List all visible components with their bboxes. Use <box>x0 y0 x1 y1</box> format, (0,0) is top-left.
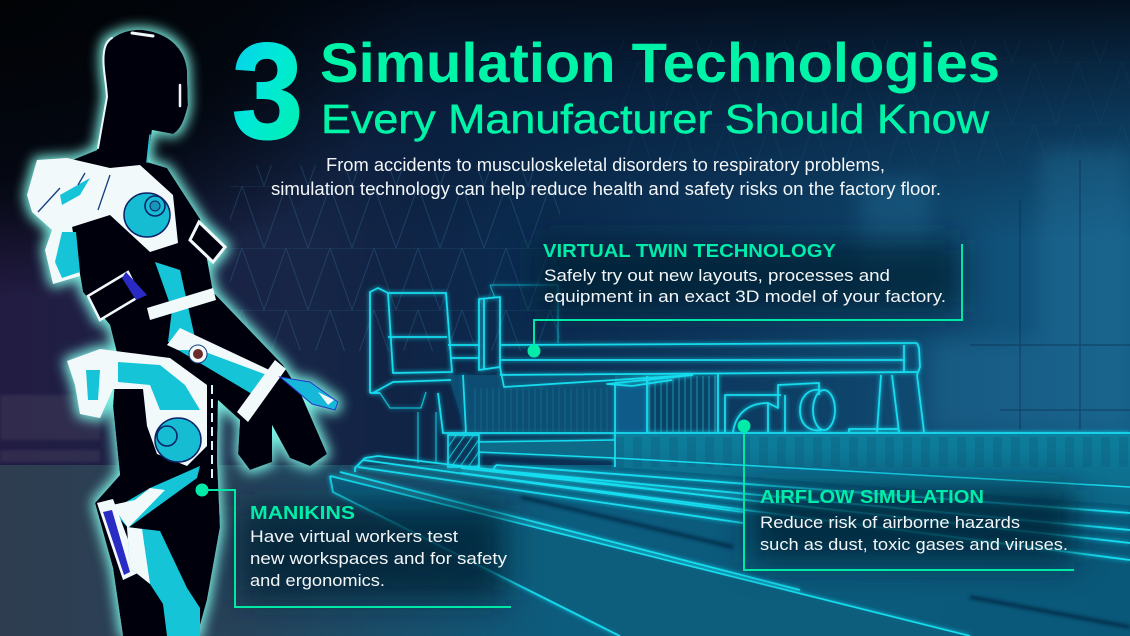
intro text <box>271 155 941 199</box>
callout: virtual twin technology: equipment in an exact 3D model of your factory. <box>544 287 946 306</box>
number 3: 3 <box>232 15 303 167</box>
text backing shades <box>240 240 1075 600</box>
hip belt <box>67 349 207 466</box>
heading line 2: Every Manufacturer Should Know <box>321 96 989 142</box>
manikin body <box>60 30 327 636</box>
left tower <box>370 288 452 393</box>
callout: manikins: new workspaces and for safety <box>250 549 508 568</box>
thumb hand cyan <box>280 377 338 410</box>
right support <box>849 375 924 432</box>
backpack <box>27 158 178 284</box>
callout: virtual twin technology <box>528 241 962 358</box>
shoulder joint <box>124 193 170 237</box>
thigh strap <box>112 466 200 528</box>
main beam <box>500 343 917 387</box>
callout: airflow simulation: AIRFLOW SIMULATION <box>760 487 984 507</box>
hip joint <box>155 418 201 462</box>
upper arm cyan <box>155 262 195 342</box>
floor cracks <box>521 497 1130 627</box>
chest strap <box>88 272 140 320</box>
head highlights <box>98 33 180 162</box>
callout: virtual twin technology: Safely try out new layouts, processes and <box>544 266 890 285</box>
title <box>232 15 1000 167</box>
intro text: From accidents to musculoskeletal disorders to respiratory problems, <box>326 155 885 175</box>
wrist cuff <box>237 360 286 422</box>
illustration: wireframe factory machine <box>330 285 1130 636</box>
intro text: simulation technology can help reduce health and safety risks on the factory floor. <box>271 179 941 199</box>
hatched block <box>448 435 479 467</box>
lower leg brace <box>127 527 200 636</box>
callout: manikins <box>196 484 511 607</box>
machine body <box>438 375 1130 433</box>
thigh pad <box>97 499 140 580</box>
second tower <box>479 297 500 370</box>
slabs and bands <box>615 433 1130 505</box>
callout: virtual twin technology: VIRTUAL TWIN TECHNOLOGY <box>543 241 836 261</box>
callout: manikins: MANIKINS <box>250 503 355 523</box>
callout: airflow simulation <box>738 420 1074 570</box>
forearm <box>167 328 280 392</box>
callout: manikins: Have virtual workers test <box>250 527 458 546</box>
duct and fan <box>725 383 819 433</box>
illustration: manikin figure wearing exoskeleton <box>27 30 338 636</box>
callout: airflow simulation: Reduce risk of airborne hazards <box>760 513 1020 532</box>
callout: airflow simulation: such as dust, toxic gases and viruses. <box>760 535 1068 554</box>
callout: manikins: and ergonomics. <box>250 571 385 590</box>
front seam <box>211 385 213 480</box>
heading line 1: Simulation Technologies <box>320 31 1000 94</box>
back strap <box>190 222 225 262</box>
lower rails <box>478 440 1130 487</box>
